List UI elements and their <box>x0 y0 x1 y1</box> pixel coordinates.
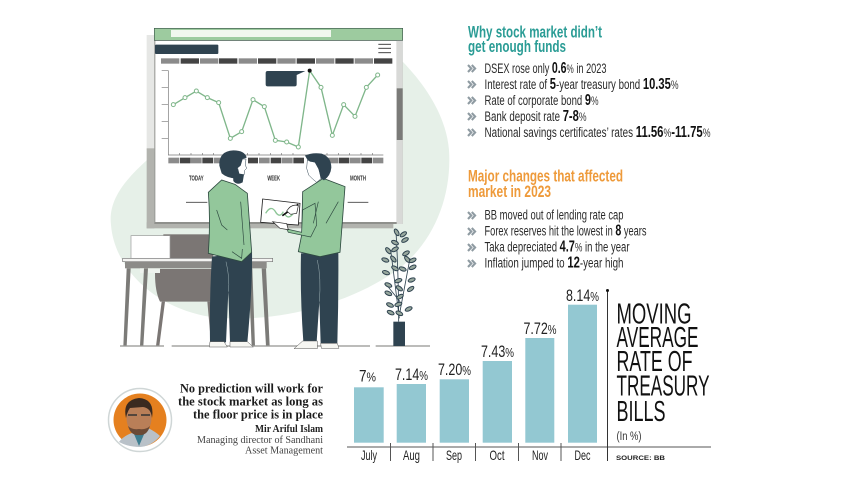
quote text: No prediction will work for <box>180 380 323 396</box>
text block: major changes <box>468 168 647 272</box>
bullet list: BB moved out of lending rate cap <box>484 208 624 222</box>
value labels <box>359 287 599 386</box>
top segment strip <box>161 58 392 64</box>
screen shadow frame <box>147 28 403 228</box>
time labels: WEEK <box>267 175 280 182</box>
desk <box>123 258 273 346</box>
time labels: MONTH <box>350 175 366 182</box>
bars <box>354 305 597 443</box>
bullet list: Rate of corporate bond 9% <box>484 92 599 109</box>
right person hair <box>305 153 331 180</box>
person right <box>261 153 345 349</box>
source: SOURCE: BB <box>616 455 665 462</box>
bullet list: DSEX rose only 0.6% in 2023 <box>484 60 606 77</box>
right person trousers <box>301 251 338 344</box>
floor line <box>120 345 430 347</box>
month labels <box>361 447 590 463</box>
left person shoes <box>209 342 253 347</box>
left person beard <box>233 168 244 184</box>
left person face <box>237 159 247 175</box>
left person trousers <box>210 252 252 342</box>
heading <box>468 24 602 56</box>
illustration: analytics screen <box>147 28 403 228</box>
month labels: Dec <box>574 447 590 463</box>
text block: why stock market didn't get enough funds <box>468 24 711 141</box>
left person jacket folds <box>217 202 244 258</box>
chart axes <box>162 71 383 155</box>
lower segment strip <box>168 158 383 163</box>
quote text <box>178 380 323 422</box>
laptop box <box>131 236 170 258</box>
chart title <box>616 298 710 443</box>
right person tablet <box>261 199 300 225</box>
background blob <box>111 50 449 318</box>
person left <box>208 150 253 347</box>
bullet list: Inflation jumped to 12-year high <box>484 254 624 272</box>
attribution: Asset Management <box>245 446 323 456</box>
chart callout <box>266 71 305 86</box>
value labels: 7.72% <box>524 320 557 338</box>
right person shoes <box>294 341 339 349</box>
right person jacket folds <box>313 202 338 223</box>
chair <box>155 234 215 346</box>
browser top bar <box>154 28 403 40</box>
right person arm <box>287 203 317 237</box>
time labels: TODAY <box>189 175 204 182</box>
attribution <box>197 424 324 456</box>
value labels: 7% <box>359 368 376 386</box>
bullet list: Taka depreciated 4.7% in the year <box>484 238 630 256</box>
plant <box>381 228 417 346</box>
heading <box>468 168 623 201</box>
left person jacket <box>208 180 252 262</box>
right person jacket <box>298 178 345 257</box>
bullet list <box>468 208 647 272</box>
month labels: Aug <box>403 447 420 463</box>
line chart <box>171 69 380 149</box>
chart title: (In %) <box>616 431 642 443</box>
dark title tab <box>155 45 218 54</box>
chart title: RATE OF <box>616 346 692 378</box>
screen body <box>155 41 397 222</box>
bar chart: treasury bills <box>347 287 711 463</box>
heading: Major changes that affected <box>468 168 623 186</box>
chart title: MOVING <box>616 298 692 330</box>
right person face <box>307 160 321 182</box>
value labels: 7.14% <box>395 366 428 384</box>
quote block <box>108 380 324 456</box>
icon: hamburger menu <box>378 44 391 53</box>
heading: market in 2023 <box>468 183 551 201</box>
left person hair <box>219 150 247 178</box>
value labels: 7.43% <box>481 343 514 361</box>
time labels <box>189 175 366 182</box>
scrollbar <box>397 41 403 224</box>
bullet list: National savings certificates’ rates 11.56%-11.75% <box>484 124 711 141</box>
icon: portrait <box>108 388 172 452</box>
screen dashes <box>186 201 368 204</box>
chart title: AVERAGE <box>616 322 698 354</box>
quote text: the stock market as long as <box>178 394 323 408</box>
attribution: Mir Ariful Islam <box>255 424 324 435</box>
heading: get enough funds <box>468 38 566 56</box>
chart title: TREASURY <box>616 370 710 402</box>
value labels: 8.14% <box>566 287 599 305</box>
bullet list: Bank deposit rate 7-8% <box>484 108 587 125</box>
illustration: desk and people <box>120 150 430 349</box>
month labels: Nov <box>532 447 548 463</box>
quote text: the floor price is in place <box>193 406 323 422</box>
month labels: July <box>361 447 377 463</box>
bullet list <box>468 60 711 141</box>
chart title: BILLS <box>616 396 666 428</box>
axis <box>347 289 711 461</box>
attribution: Managing director of Sandhani <box>197 435 323 446</box>
value labels: 7.20% <box>438 361 471 379</box>
month labels: Oct <box>490 447 505 463</box>
bullet list: Interest rate of 5-year treasury bond 10.35% <box>484 76 679 93</box>
heading: Why stock market didn’t <box>468 24 602 42</box>
month labels: Sep <box>446 447 462 463</box>
bullet list: Forex reserves hit the lowest in 8 years <box>484 222 647 240</box>
